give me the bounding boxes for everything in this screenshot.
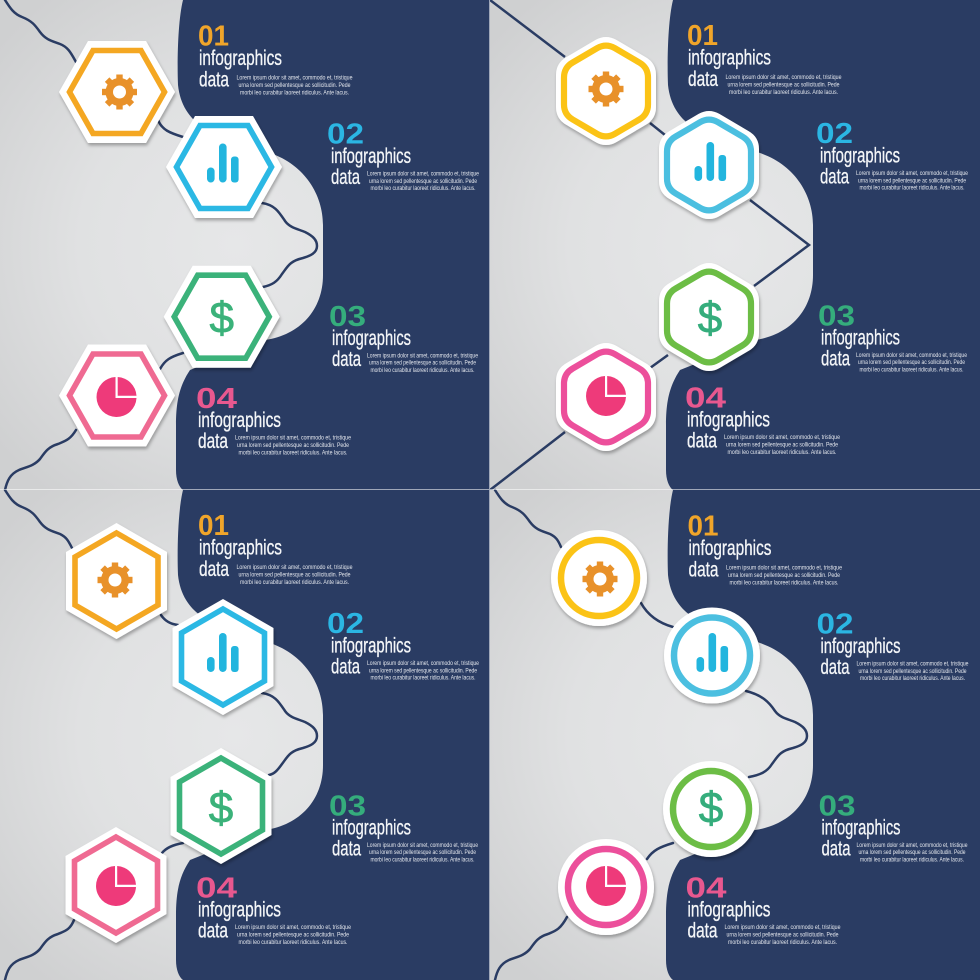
text block 01: urna lorem sed pellentesque ac sollicitudin. Pede bbox=[238, 572, 351, 578]
circle 03 with dollar icon: $ bbox=[699, 784, 723, 832]
text block 04: data bbox=[198, 918, 228, 942]
text block 02 bbox=[327, 118, 479, 192]
text block 02: infographics bbox=[820, 634, 900, 658]
text block 02: data bbox=[331, 654, 360, 678]
pointed hexagon 01 with gear icon bbox=[66, 523, 167, 639]
text block 03: 03 bbox=[329, 790, 366, 822]
text block 02: data bbox=[820, 655, 850, 679]
text block 04: infographics bbox=[198, 898, 281, 922]
text block 02 bbox=[816, 608, 969, 682]
text block 03: urna lorem sed pellentesque ac sollicitudin. Pede bbox=[369, 360, 476, 366]
text block 01: Lorem ipsum dolor sit amet, commodo et, tristique bbox=[236, 74, 353, 82]
text block 04: urna lorem sed pellentesque ac sollicitudin. Pede bbox=[726, 442, 838, 448]
text block 02 bbox=[816, 118, 968, 192]
text block 04: data bbox=[198, 429, 228, 453]
hexagon 01 with gear icon bbox=[59, 41, 175, 143]
text block 01: data bbox=[199, 68, 229, 92]
text block 01: morbi leo curabitur laoreet ridiculus. Ante lacus. bbox=[240, 579, 349, 586]
text block 03: data bbox=[332, 836, 361, 860]
circle 04 with pie icon bbox=[558, 839, 654, 935]
text block 02: Lorem ipsum dolor sit amet, commodo et, tristique bbox=[367, 170, 479, 178]
text block 03: data bbox=[821, 346, 850, 370]
text block 01 bbox=[198, 20, 353, 96]
text block 01: infographics bbox=[688, 46, 771, 70]
text block 01: 01 bbox=[688, 510, 718, 542]
text block 02: infographics bbox=[331, 634, 411, 658]
text block 04: 04 bbox=[686, 872, 726, 904]
pointed hexagon 02 with bar chart icon bbox=[172, 599, 274, 715]
text block 04: morbi leo curabitur laoreet ridiculus. Ante lacus. bbox=[238, 939, 348, 946]
text block 04: data bbox=[688, 918, 718, 942]
connector: wavy line bbox=[5, 0, 317, 490]
text block 03: Lorem ipsum dolor sit amet, commodo et, tristique bbox=[367, 352, 478, 360]
text block 01: urna lorem sed pellentesque ac sollicitudin. Pede bbox=[238, 82, 351, 89]
hexagon 04 with pie icon bbox=[59, 344, 175, 446]
connector: straight line bbox=[490, 0, 809, 490]
rounded hexagon 04 with pie icon bbox=[556, 343, 656, 451]
text block 01: Lorem ipsum dolor sit amet, commodo et, tristique bbox=[726, 564, 842, 572]
text block 03 bbox=[818, 300, 967, 374]
text block 03 bbox=[818, 790, 968, 864]
text block 02: infographics bbox=[820, 144, 900, 168]
text block 04: Lorem ipsum dolor sit amet, commodo et, tristique bbox=[724, 924, 841, 931]
panel: bottom-right circle steps bbox=[490, 490, 980, 980]
connector: wavy line bbox=[5, 490, 317, 980]
circle 02 with bar chart icon bbox=[664, 608, 760, 704]
text block 03 bbox=[329, 301, 478, 374]
text block 01: 01 bbox=[687, 20, 718, 52]
panel: top-right rounded hexagon steps bbox=[490, 0, 980, 490]
text block 01 bbox=[688, 510, 842, 586]
text block 03 bbox=[329, 790, 478, 864]
text block 04: Lorem ipsum dolor sit amet, commodo et, tristique bbox=[235, 434, 351, 442]
text block 04: morbi leo curabitur laoreet ridiculus. Ante lacus. bbox=[728, 449, 837, 456]
text block 04: 04 bbox=[685, 382, 726, 414]
text block 04: infographics bbox=[198, 408, 281, 432]
text block 03: infographics bbox=[821, 326, 900, 350]
text block 04: data bbox=[687, 428, 717, 452]
text block 03: data bbox=[822, 836, 851, 860]
text block 02: data bbox=[820, 164, 849, 188]
text block 01: urna lorem sed pellentesque ac sollicitudin. Pede bbox=[728, 82, 840, 88]
text block 02: 02 bbox=[816, 608, 854, 640]
text block 04 bbox=[196, 383, 351, 456]
circle 03 with dollar icon bbox=[663, 761, 759, 857]
text block 01 bbox=[198, 510, 353, 586]
text block 04: morbi leo curabitur laoreet ridiculus. Ante lacus. bbox=[728, 939, 837, 946]
text block 01: data bbox=[199, 557, 229, 581]
text block 03: data bbox=[332, 347, 361, 371]
text block 04: urna lorem sed pellentesque ac sollicitudin. Pede bbox=[726, 932, 839, 938]
text block 01: data bbox=[688, 558, 719, 582]
text block 01: 01 bbox=[198, 20, 229, 52]
text block 04: Lorem ipsum dolor sit amet, commodo et, tristique bbox=[235, 924, 351, 931]
pointed hexagon 03 with dollar icon bbox=[170, 748, 272, 864]
text block 01: morbi leo curabitur laoreet ridiculus. Ante lacus. bbox=[729, 89, 838, 96]
text block 03: 03 bbox=[329, 301, 366, 333]
text block 01: infographics bbox=[199, 536, 282, 560]
hexagon 02 with bar chart icon bbox=[166, 116, 282, 218]
text block 04: infographics bbox=[687, 408, 770, 432]
rounded hexagon 03 with dollar icon: $ bbox=[698, 294, 722, 342]
text block 02: infographics bbox=[331, 144, 411, 168]
text block 04: urna lorem sed pellentesque ac sollicitudin. Pede bbox=[237, 442, 349, 449]
text block 04 bbox=[685, 382, 840, 456]
text block 03: infographics bbox=[822, 816, 900, 840]
text block 03: urna lorem sed pellentesque ac sollicitudin. Pede bbox=[369, 849, 476, 856]
text block 04: infographics bbox=[688, 898, 770, 922]
text block 03: infographics bbox=[332, 326, 411, 350]
text block 01: urna lorem sed pellentesque ac sollicitudin. Pede bbox=[728, 572, 840, 579]
text block 03: morbi leo curabitur laoreet ridiculus. Ante lacus. bbox=[370, 856, 475, 864]
text block 01: morbi leo curabitur laoreet ridiculus. Ante lacus. bbox=[240, 90, 349, 96]
text block 01: infographics bbox=[199, 46, 282, 70]
text block 04: 04 bbox=[196, 872, 237, 904]
text block 04: urna lorem sed pellentesque ac sollicitudin. Pede bbox=[237, 932, 349, 938]
text block 04 bbox=[196, 872, 351, 946]
text block 02: urna lorem sed pellentesque ac sollicitudin. Pede bbox=[369, 178, 477, 185]
text block 01: morbi leo curabitur laoreet ridiculus. Ante lacus. bbox=[730, 580, 839, 586]
text block 02: Lorem ipsum dolor sit amet, commodo et, tristique bbox=[367, 660, 479, 667]
text block 01 bbox=[687, 20, 842, 96]
text block 02: 02 bbox=[327, 118, 364, 150]
text block 03: Lorem ipsum dolor sit amet, commodo et, tristique bbox=[367, 842, 478, 849]
text block 02: morbi leo curabitur laoreet ridiculus. Ante lacus. bbox=[370, 674, 476, 682]
rounded hexagon 01 with gear icon bbox=[556, 37, 656, 145]
text block 03: 03 bbox=[818, 790, 856, 822]
panel: top-left flat hexagon steps bbox=[0, 0, 490, 490]
pointed hexagon 04 with pie icon bbox=[66, 827, 166, 943]
circle 01 with gear icon bbox=[551, 530, 647, 626]
rounded hexagon 02 with bar chart icon bbox=[659, 111, 759, 219]
text block 01: infographics bbox=[688, 536, 772, 560]
text block 01: Lorem ipsum dolor sit amet, commodo et, tristique bbox=[236, 564, 353, 571]
text block 04: Lorem ipsum dolor sit amet, commodo et, tristique bbox=[724, 434, 840, 441]
text block 01: 01 bbox=[198, 510, 229, 542]
text block 01: Lorem ipsum dolor sit amet, commodo et, tristique bbox=[726, 74, 842, 81]
rounded hexagon 03 with dollar icon bbox=[659, 263, 759, 371]
text block 04: 04 bbox=[196, 383, 237, 415]
text block 04: morbi leo curabitur laoreet ridiculus. Ante lacus. bbox=[238, 450, 348, 456]
pointed hexagon 03 with dollar icon: $ bbox=[209, 784, 233, 832]
text block 02: data bbox=[331, 165, 360, 189]
text block 03: infographics bbox=[332, 816, 411, 840]
hexagon 03 with dollar icon: $ bbox=[209, 294, 234, 343]
panel: bottom-left pointed hexagon steps bbox=[0, 490, 490, 980]
text block 04 bbox=[686, 872, 841, 946]
text block 02: urna lorem sed pellentesque ac sollicitudin. Pede bbox=[369, 668, 477, 674]
hexagon 03 with dollar icon bbox=[164, 266, 280, 368]
text block 02: morbi leo curabitur laoreet ridiculus. Ante lacus. bbox=[370, 185, 476, 192]
text block 02 bbox=[327, 608, 479, 682]
text block 03: 03 bbox=[818, 300, 855, 332]
text block 02: 02 bbox=[327, 608, 364, 640]
text block 02: 02 bbox=[816, 118, 853, 150]
text block 03: morbi leo curabitur laoreet ridiculus. Ante lacus. bbox=[370, 367, 475, 374]
connector: wavy line bbox=[495, 490, 807, 980]
text block 01: data bbox=[688, 67, 718, 91]
